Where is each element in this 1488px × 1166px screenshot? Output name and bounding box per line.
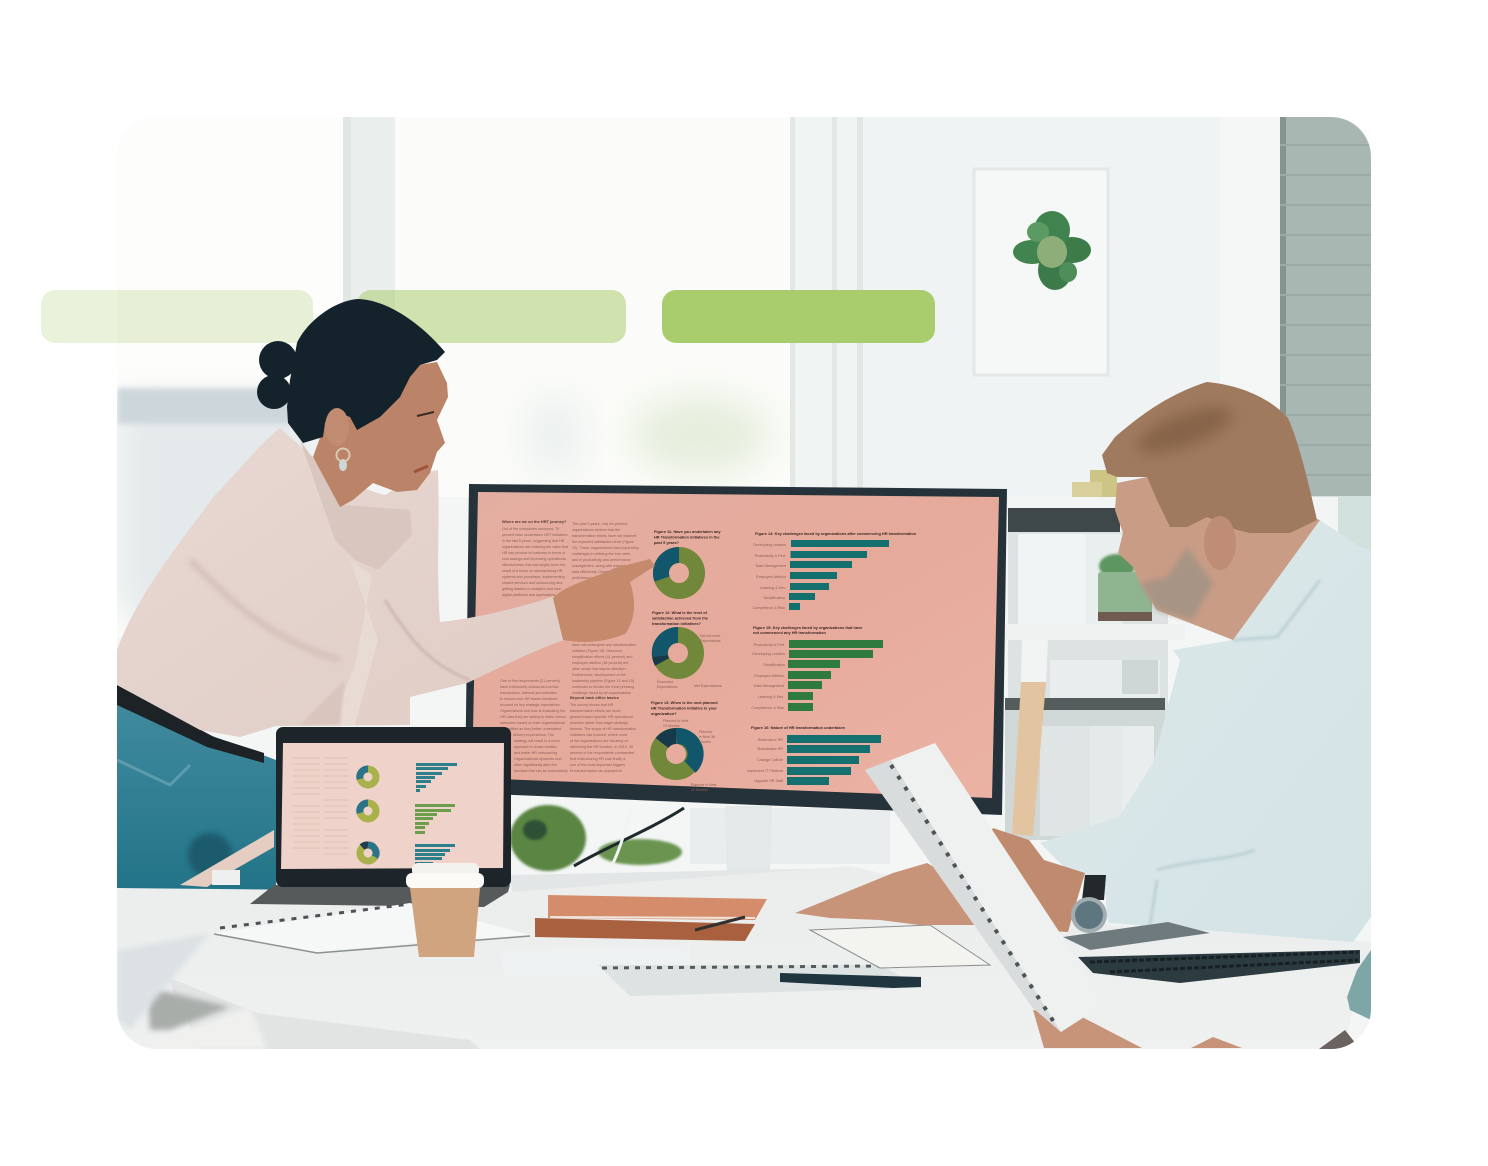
report text columns: transactions. Internal and activities [500,691,557,695]
report text columns: proficiency in the current strategies [572,576,629,580]
donut labels: Planned in Next [691,783,716,787]
report text columns: services that can be successfully [514,769,568,773]
woman: pointing hand [553,559,655,642]
man: hair [1102,382,1317,533]
report text columns [500,519,639,773]
woman: face and neck [313,362,448,507]
figure headings: HR Transformation initiatives in the [654,534,720,540]
donut labels: Exceeded [657,680,673,684]
man: face [1115,477,1320,640]
laptop donut charts [360,769,376,861]
coffee cup [406,863,484,957]
figure headings: Figure 13: When is the next planned [651,700,718,705]
progress pill 3 [662,290,935,343]
bar category labels: Productivity & Perf. [754,643,785,647]
stacked notebooks [535,895,767,941]
figure headings: Figure 14: Key challenges faced by organizations after commencing HR transformation [755,531,917,536]
report text columns: other areas that require attention. [572,667,627,671]
illustration: office meeting scene with rounded corners and progress pills [41,117,1371,1049]
figure headings: transformation initiatives? [652,621,701,626]
donut labels [657,634,722,792]
donut labels: Expectations [700,639,721,643]
man: hair dark texture [1133,398,1237,462]
laptop report columns [293,758,348,854]
report text columns: employee attrition (38 percent) are [572,661,628,665]
report text columns: digital platforms and applications. [502,593,557,597]
figure headings: HR Transformation initiative in your [651,706,717,710]
report text columns: simplification efforts (41 percent) and [572,655,632,659]
man: forearm behind report [980,828,1085,932]
report text columns: challenges in defining the true roles [572,552,630,556]
report text columns: the expected satisfaction level (Figure [572,540,634,544]
progress pill 2 [357,290,626,343]
progress pill 1 [41,290,313,343]
report text columns: organizations are realizing the value that [502,545,568,549]
report text columns: HR can provide to business in terms of [502,551,566,555]
report text columns: organizations believe that the [572,528,620,532]
woman: hair [287,299,445,443]
donut labels: Did not meet [700,634,720,638]
donut labels: Planned [699,730,712,734]
table underside [167,977,480,1049]
report text columns: management, along with managing [572,564,629,568]
report text columns: One in five respondents (21 percent) [500,679,560,683]
report text columns: to ensure core HR teams remained [500,697,557,701]
donut labels: 24 Months [663,724,680,728]
report text columns: often significantly alter the [514,763,557,767]
figure headings: Figure 12: What is the level of [652,610,708,615]
figure headings: past 5 years? [654,540,679,545]
donut labels: 12 Months [691,788,708,792]
monitor stand [725,806,772,876]
report text columns: The survey shows that HR [570,703,614,707]
report text columns: rethinking the HR function. In 2016, 35 [570,745,633,749]
bar chart: figure 14 [789,540,889,610]
donut chart 1 [661,555,697,591]
report text columns: 12). These organizations face impending [572,546,639,550]
bar category labels: Simplification [763,663,785,667]
bar category labels: Competence & Risk [752,606,785,610]
figure headings: Figure 15: Key challenges faced by organizations that have [753,625,863,630]
figure headings [651,529,917,730]
laptop [250,727,511,907]
bar category labels: Developing Leaders [752,652,785,656]
woman: earring [336,448,350,471]
report text columns: one of the most important triggers [570,763,625,767]
bar category labels: Implement IT Platform [747,769,783,773]
woman: ear [325,408,349,446]
report text columns: Where are we on the HRT journey? [502,519,567,524]
report text columns: initiative (Figure 15). Moreover, [572,649,623,653]
bar category labels: Change Culture [757,758,783,762]
report text columns: capabilities as they better understand [500,727,561,731]
report text columns: of the organizations are focusing on [570,739,628,743]
photo panel: background layer [117,117,1371,1049]
plant, cables and white cabinet below monitor [510,805,890,871]
report text columns: Organizations and how is evaluating the [500,709,565,713]
bar category labels: Upgrade HR Staff [754,779,784,783]
photo panel: people and desk layer [117,299,1371,1049]
donut labels: in Next 36 [699,735,715,739]
man: notebook and pens [1063,922,1360,983]
report text columns: and better HR outsourcing [514,751,557,755]
donut labels: Planned in Next [663,719,688,723]
report text columns: Furthermore, development of the [572,673,626,677]
report text columns: service delivery implications. The [500,733,554,737]
man: hand and forearm on table [795,863,1000,925]
bar category labels: Employee Attrition [756,575,786,579]
report text columns: HR roles they are willing to retain versus [500,715,566,719]
keyboard [511,868,812,892]
report text columns: outsource based on their organizational [500,721,565,725]
bar category labels: Standardize HR [757,747,783,751]
wall picture with plant [974,169,1108,375]
monitor screen [472,492,999,798]
laptop bar charts [415,763,457,865]
report text columns: challenge faced by all organizations. [572,691,631,695]
report text columns: have not undergone any transformation [572,643,636,647]
bar category labels: Data Management [754,684,784,688]
man: wristwatch [1071,875,1107,933]
report text columns: to transformation as opposed to [570,769,622,773]
bar category labels: Productivity & Perf. [755,554,786,558]
report text columns: continues to remain the most pressing [572,685,634,689]
donut chart 3 [658,736,696,772]
shelving, binders and side table [1005,470,1185,840]
bar chart: figure 16 [787,735,881,785]
report text columns: geared toward specific HR operational [570,715,633,719]
report text columns: shared services and outsourcing and [502,581,562,585]
report text columns: strategy will result in a more [514,739,560,743]
report text columns: Organizational dynamics and [514,757,562,761]
report text columns: in the last 5 years, suggesting that HR [502,539,565,543]
woman: eye and lips [414,412,434,472]
donut labels: Months [699,740,711,744]
report text columns: data effectively. Organizations lack [572,570,629,574]
donut labels: Met Expectations [694,684,722,688]
man: ear [1204,516,1236,570]
woman: blouse folds and bow [190,440,470,725]
report text columns: percent of the respondents commented [570,751,634,755]
report text columns: and in productivity and performance [572,558,631,562]
laptop screen [281,743,504,869]
spiral notebook on table [214,903,530,953]
figure headings: satisfaction achieved from the [652,616,709,620]
report text columns: transformation efforts have not reached [572,534,636,538]
background: windows and wall [117,117,1371,1049]
woman: jeans and belt [117,685,276,890]
donut chart 2 [660,635,696,671]
figure headings: Figure 16: Nature of HR transformation undertaken [751,725,846,730]
report text columns: have extensively outsourced certain [500,685,559,689]
woman: hair bun [257,341,297,409]
report text columns: Beyond back office basics [570,695,619,700]
report text columns: effectiveness; this has largely been the [502,563,565,567]
bar category labels: Data Management [756,564,786,568]
bar category labels: Simplification [763,596,785,600]
report text columns: The past 5 years, only six percent [572,522,627,526]
bar category labels: Learning & Dev. [760,586,786,590]
report text columns: priorities rather than larger strategic [570,721,628,725]
man: shirt folds and cuff [1150,580,1320,925]
figure headings: organization? [651,711,677,716]
report text columns: percent have undertaken HRT initiatives [502,533,568,537]
foreground blurred papers left [117,933,267,1049]
table [117,866,1108,926]
bar category labels: Competence & Risk [751,706,784,710]
man: beard [1140,547,1213,620]
donut labels: Expectations [657,685,678,689]
woman: blouse and arm [117,428,564,737]
figure headings: Figure 11: Have you undertaken any [654,529,721,534]
report text columns: leadership pipeline (Figure 14 and 15) [572,679,634,683]
report text columns: that restructuring HR was finally a [570,757,626,761]
foreground hands and sleeve [1033,950,1371,1049]
report text columns: cost savings and improving operational [502,557,566,561]
report text columns: systems and processes, implementing [502,575,565,579]
report text columns: getting started on analytics and new [502,587,561,591]
bar category labels: Restructure HR [758,738,783,742]
report text columns: transformation efforts are more [570,709,621,713]
bar chart: figure 15 [788,640,883,711]
man: shirt [1040,520,1371,942]
report text columns: focused on key strategic imperatives. [500,703,561,707]
bar category labels: Developing Leaders [753,543,786,547]
foreground spiral report held by reader [865,743,1106,1032]
report text columns: initiatives has evolved, where most [570,733,627,737]
report text columns: themes. The scope of HR transformation [570,727,636,731]
report text columns: approach to those realistic [514,745,557,749]
monitor [465,484,1007,815]
figure headings: not commenced any HR transformation [753,630,826,635]
bar category labels [747,543,786,783]
report text columns: Out of the companies surveyed, 70 [502,527,559,531]
bar category labels: Employee Attrition [754,674,784,678]
bar category labels: Learning & Dev. [758,695,784,699]
papers and phone on table [500,925,990,996]
report text columns: result of a focus on standardizing HR [502,569,563,573]
